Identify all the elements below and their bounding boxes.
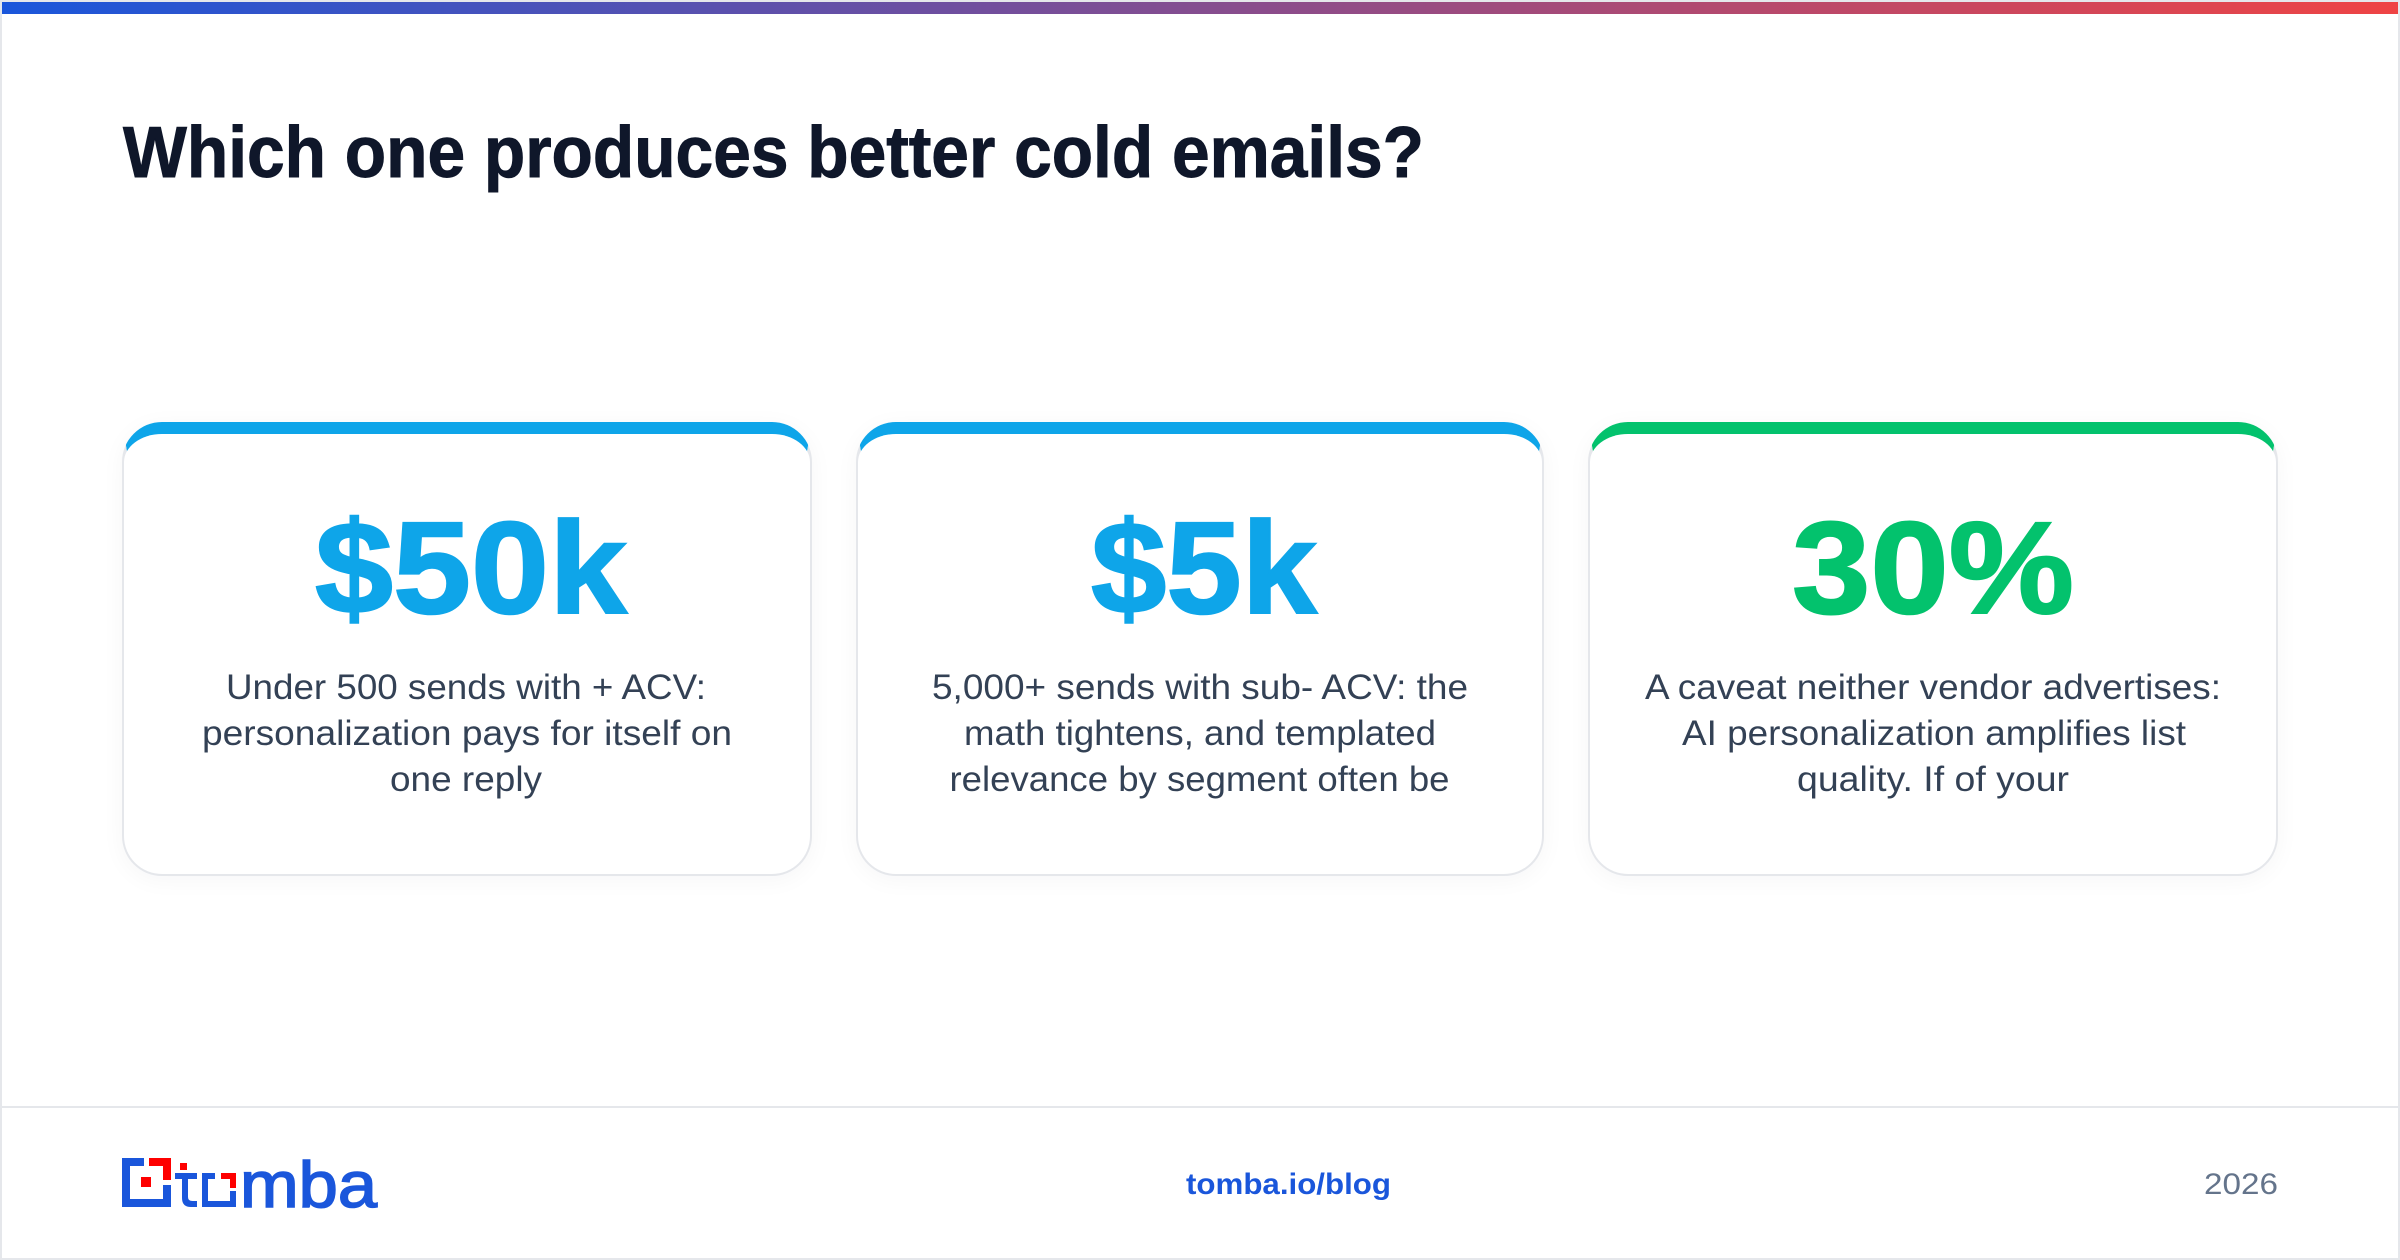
panel: $50k card (122, 422, 812, 876)
footer (0, 1106, 2400, 1260)
text: card description: one reply (390, 760, 543, 799)
text: card description: 5,000+ sends with sub- ACV: the (932, 668, 1468, 707)
logo: tomba: mba (240, 1148, 378, 1221)
text: card description: AI personalization amplifies list (1682, 714, 2186, 753)
text: card description: Under 500 sends with + ACV: (226, 668, 706, 707)
panel: 30% card (1588, 422, 2278, 876)
text: card description (932, 668, 1468, 799)
stat: $5k: $5k (1091, 494, 1317, 641)
text: card description (202, 668, 732, 799)
text: card description: personalization pays for itself on (202, 714, 732, 753)
stat: $50k: $50k (315, 494, 627, 641)
text: card description: A caveat neither vendor advertises: (1645, 668, 2221, 707)
footer link: tomba.io/blog (1186, 1168, 1391, 1201)
text: card description: math tightens, and templated (964, 714, 1436, 753)
panel: $5k card (856, 422, 1544, 876)
footer year: 2026 (2204, 1168, 2278, 1201)
text: card description: relevance by segment often be (950, 760, 1450, 799)
stat: 30%: 30% (1792, 494, 2074, 641)
logo: tomba (122, 1148, 378, 1221)
text: card description: quality. If of your (1797, 760, 2069, 799)
text: card description (1645, 668, 2221, 799)
top gradient bar (2, 2, 2398, 14)
title: Which one produces better cold emails? (123, 113, 1424, 193)
